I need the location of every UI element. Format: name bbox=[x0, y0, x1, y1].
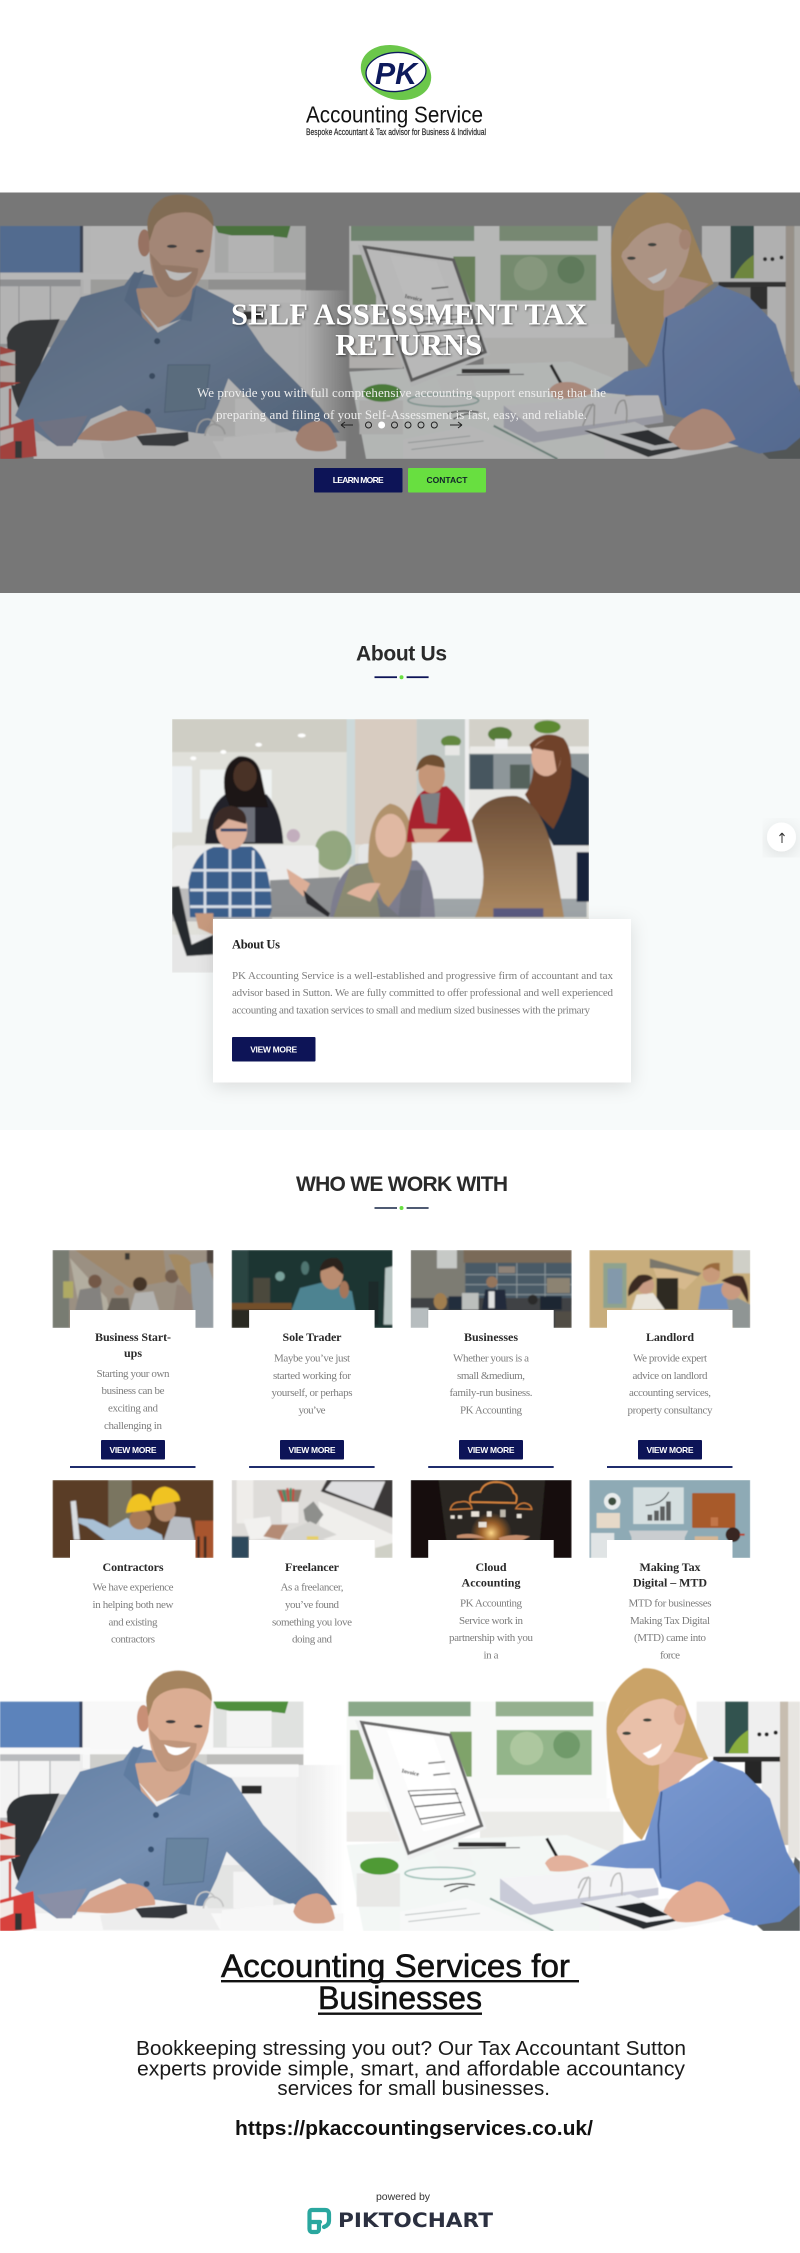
button: VIEW MORE bbox=[110, 1445, 157, 1455]
hero photo bbox=[0, 192, 800, 459]
description: As a freelancer, bbox=[280, 1582, 344, 1594]
white plate bbox=[249, 1540, 375, 1558]
card: business start-ups: exciting and bbox=[108, 1402, 158, 1414]
description: We have experience bbox=[92, 1582, 174, 1594]
title: Cloud bbox=[476, 1560, 507, 1574]
body text bbox=[136, 2038, 686, 2100]
photo bbox=[52, 1480, 214, 1558]
description: We provide expert bbox=[633, 1352, 707, 1364]
description: Starting your own bbox=[96, 1368, 170, 1380]
card: sole trader: you’ve bbox=[298, 1404, 326, 1416]
card: freelancer bbox=[232, 1480, 393, 1646]
card: cloud accounting: in a bbox=[484, 1650, 499, 1662]
scroll-to-top button bbox=[767, 822, 796, 852]
card text: advisor based in Sutton. We are fully committed to offer professional and well experienced bbox=[232, 987, 614, 999]
title: Business Start- bbox=[95, 1330, 171, 1344]
section heading: WHO WE WORK WITH bbox=[296, 1173, 508, 1196]
powered by piktochart: powered by bbox=[376, 2191, 431, 2203]
white plate bbox=[70, 1310, 196, 1328]
hero title bbox=[231, 298, 587, 362]
card text: PK Accounting Service is a well-established and progressive firm of accountant and tax bbox=[232, 970, 614, 982]
card: businesses: family-run business. bbox=[450, 1387, 533, 1399]
panel: who we work with bbox=[52, 1173, 750, 1662]
card: making tax digital: force bbox=[660, 1650, 680, 1662]
icon: PK badge bbox=[354, 36, 438, 109]
button: VIEW MORE bbox=[646, 1445, 694, 1455]
icon: piktochart mark bbox=[310, 2210, 329, 2232]
about card bbox=[213, 919, 631, 1082]
button bbox=[459, 1440, 523, 1460]
photo bbox=[52, 1250, 214, 1328]
card: freelancer: you’ve found bbox=[285, 1599, 340, 1611]
description: MTD for businesses bbox=[628, 1598, 712, 1610]
card: sole trader: yourself, or perhaps bbox=[272, 1387, 352, 1399]
title: Freelancer bbox=[285, 1560, 340, 1574]
title: Landlord bbox=[646, 1330, 694, 1344]
description: Whether yours is a bbox=[453, 1352, 529, 1364]
hero title: SELF ASSESSMENT TAX bbox=[231, 298, 587, 332]
slider controls bbox=[341, 422, 462, 428]
photo bbox=[232, 1250, 393, 1328]
card: making tax digital: (MTD) came into bbox=[634, 1632, 706, 1644]
button bbox=[280, 1440, 344, 1460]
card text bbox=[232, 970, 614, 1016]
body text: services for small businesses. bbox=[277, 2078, 550, 2100]
panel: hero bbox=[0, 192, 800, 593]
about photo: team meeting bbox=[172, 719, 589, 972]
powered by piktochart bbox=[310, 2191, 494, 2232]
heading: accounting services for businesses: Businesses bbox=[318, 1980, 482, 2016]
white plate bbox=[70, 1540, 196, 1558]
heading: accounting services for businesses: Accounting Services for bbox=[221, 1948, 570, 1984]
card text: accounting and taxation services to small and medium sized businesses with the primary bbox=[232, 1004, 590, 1016]
title: Contractors bbox=[102, 1560, 164, 1574]
card: freelancer: something you love bbox=[272, 1616, 352, 1628]
logo bbox=[306, 36, 486, 138]
logo tagline: Bespoke Accountant & Tax advisor for Business & Individual bbox=[306, 127, 486, 138]
logo name: Accounting Service bbox=[306, 102, 483, 128]
body text: Bookkeeping stressing you out? Our Tax Accountant Sutton bbox=[136, 2038, 686, 2060]
hero text: We provide you with full comprehensive accounting support ensuring that the bbox=[197, 385, 606, 400]
card: businesses: small &medium, bbox=[457, 1370, 525, 1382]
card: making tax digital: Making Tax Digital bbox=[630, 1615, 710, 1627]
photo bbox=[589, 1480, 750, 1558]
title: Businesses bbox=[464, 1330, 518, 1344]
hero text bbox=[197, 385, 606, 422]
hero title: RETURNS bbox=[335, 328, 482, 362]
card: cloud accounting: Accounting bbox=[462, 1576, 520, 1590]
card: freelancer: doing and bbox=[292, 1634, 332, 1646]
photo: accountants at desks bbox=[0, 1668, 800, 1931]
card: business start-ups: business can be bbox=[102, 1385, 165, 1397]
white plate bbox=[428, 1310, 554, 1328]
button: contact: CONTACT bbox=[426, 475, 468, 485]
title: Making Tax bbox=[640, 1560, 700, 1574]
body text: experts provide simple, smart, and affordable accountancy bbox=[137, 2058, 685, 2080]
card: landlord: property consultancy bbox=[628, 1404, 713, 1416]
card: landlord bbox=[589, 1250, 750, 1468]
card: contractors: in helping both new bbox=[92, 1599, 174, 1611]
card: businesses: PK Accounting bbox=[460, 1404, 522, 1416]
card heading: About Us bbox=[232, 938, 280, 952]
wordmark: PIKTOCHART bbox=[338, 2209, 494, 2232]
card: sole trader bbox=[232, 1250, 393, 1468]
card: business start-ups: challenging in bbox=[104, 1420, 162, 1432]
photo bbox=[589, 1250, 750, 1328]
card: landlord: advice on landlord bbox=[632, 1370, 708, 1382]
button: VIEW MORE bbox=[468, 1445, 515, 1455]
card: contractors: and existing bbox=[108, 1616, 158, 1628]
button bbox=[101, 1440, 165, 1460]
white plate bbox=[249, 1310, 375, 1328]
card: cloud accounting bbox=[411, 1480, 572, 1662]
button: view more: VIEW MORE bbox=[250, 1044, 298, 1054]
photo bbox=[410, 1480, 572, 1558]
card: business start-ups bbox=[52, 1250, 214, 1468]
card: contractors: contractors bbox=[111, 1634, 155, 1646]
button: view more bbox=[232, 1037, 316, 1062]
website url: https://pkaccountingservices.co.uk/ bbox=[235, 2118, 593, 2140]
white plate bbox=[607, 1310, 732, 1328]
card: cloud accounting: Service work in bbox=[459, 1615, 524, 1627]
card: making tax digital bbox=[589, 1480, 750, 1662]
heading: accounting services for businesses bbox=[221, 1948, 579, 2016]
title: Sole Trader bbox=[282, 1330, 342, 1344]
card: business start-ups: ups bbox=[124, 1346, 142, 1360]
photo bbox=[232, 1480, 393, 1558]
photo bbox=[410, 1250, 572, 1328]
icon: PK badge: PK bbox=[375, 56, 420, 91]
panel: about bbox=[0, 593, 800, 1130]
about heading: About Us bbox=[356, 642, 447, 666]
hero text: preparing and filing of your Self-Assessment is fast, easy, and reliable. bbox=[216, 407, 587, 422]
button: learn more: LEARN MORE bbox=[333, 475, 384, 485]
card: cloud accounting: partnership with you bbox=[449, 1632, 534, 1644]
description: PK Accounting bbox=[460, 1598, 522, 1610]
card: making tax digital: Digital – MTD bbox=[633, 1576, 707, 1590]
button: contact bbox=[408, 468, 486, 492]
card: landlord: accounting services, bbox=[629, 1387, 711, 1399]
white plate bbox=[607, 1540, 732, 1558]
card: sole trader: started working for bbox=[273, 1370, 351, 1382]
card: contractors bbox=[52, 1480, 214, 1646]
white plate bbox=[428, 1540, 554, 1558]
button: learn more bbox=[314, 468, 402, 492]
button: VIEW MORE bbox=[288, 1445, 336, 1455]
card: businesses bbox=[411, 1250, 572, 1468]
description: Maybe you’ve just bbox=[274, 1352, 350, 1364]
button bbox=[638, 1440, 702, 1460]
